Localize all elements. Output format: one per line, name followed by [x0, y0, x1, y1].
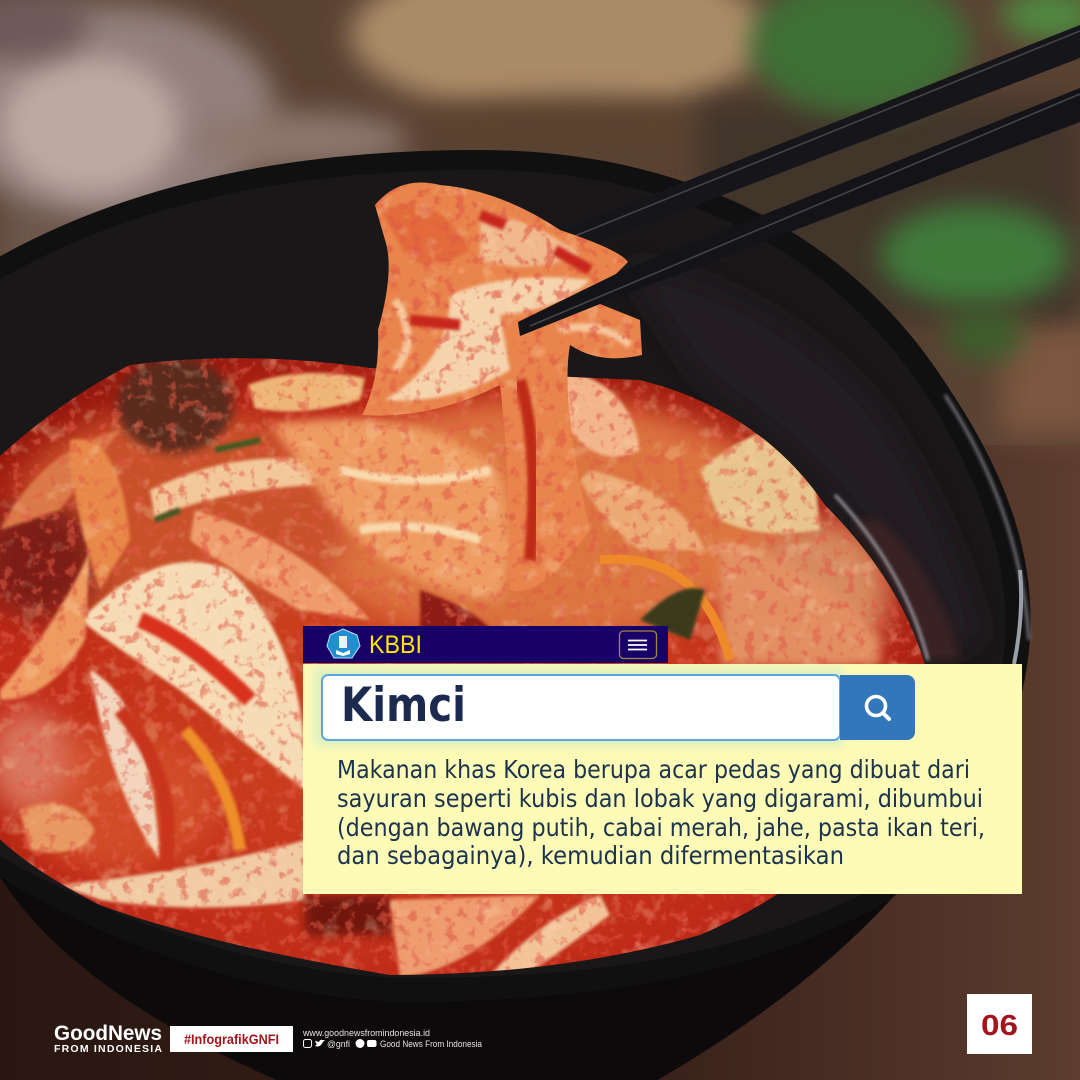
- definition text: dan sebagainya), kemudian difermentasikan: [337, 841, 844, 870]
- social links: [302, 1028, 482, 1049]
- KBBI wordmark: KBBI: [369, 631, 422, 659]
- KBBI header bar: [303, 626, 668, 663]
- icons: instagram, twitter: [304, 1040, 325, 1048]
- bowl body: [0, 860, 895, 1080]
- card background: [303, 664, 1022, 894]
- icon: menu button: [620, 631, 656, 658]
- dictionary card: [303, 626, 1022, 894]
- kimchi in bowl: [0, 350, 950, 990]
- search box: [322, 675, 840, 740]
- definition text: (dengan bawang putih, cabai merah, jahe, pasta ikan teri,: [337, 813, 985, 842]
- chopstick: upper: [558, 25, 1080, 246]
- page number badge: [967, 994, 1032, 1054]
- page number badge: 06: [981, 1010, 1018, 1042]
- logo: GoodNews From Indonesia: FROM INDONESIA: [54, 1043, 162, 1055]
- chili flecks texture: [0, 350, 950, 990]
- kimchi held by chopsticks: [362, 182, 642, 591]
- bowl interior: [0, 170, 1006, 978]
- definition text: Makanan khas Korea berupa acar pedas yang dibuat dari: [337, 755, 970, 784]
- definition text: [337, 755, 985, 870]
- definition text: sayuran seperti kubis dan lobak yang digarami, dibumbui: [337, 784, 983, 813]
- social links: Good News From Indonesia: [380, 1039, 482, 1049]
- social links: @gnfi: [327, 1039, 350, 1049]
- search term: Kimci: [341, 678, 466, 733]
- logo: GoodNews From Indonesia: [54, 1022, 162, 1055]
- hashtag badge: #InfografikGNFI: [184, 1032, 279, 1047]
- social links: www.goodnewsfromindonesia.id: [302, 1028, 430, 1038]
- logo: GoodNews From Indonesia: GoodNews: [54, 1022, 162, 1045]
- chopstick: lower: [518, 88, 1080, 336]
- icon: magnifier: [866, 696, 889, 719]
- icons: facebook, youtube: [356, 1039, 376, 1048]
- hashtag badge: [170, 1026, 293, 1052]
- cabbage pieces: [80, 562, 305, 790]
- bowl rim: [0, 150, 1031, 1002]
- footer: [54, 1022, 482, 1055]
- icon: Kemendikbud emblem: [327, 629, 360, 658]
- search button: [840, 675, 915, 740]
